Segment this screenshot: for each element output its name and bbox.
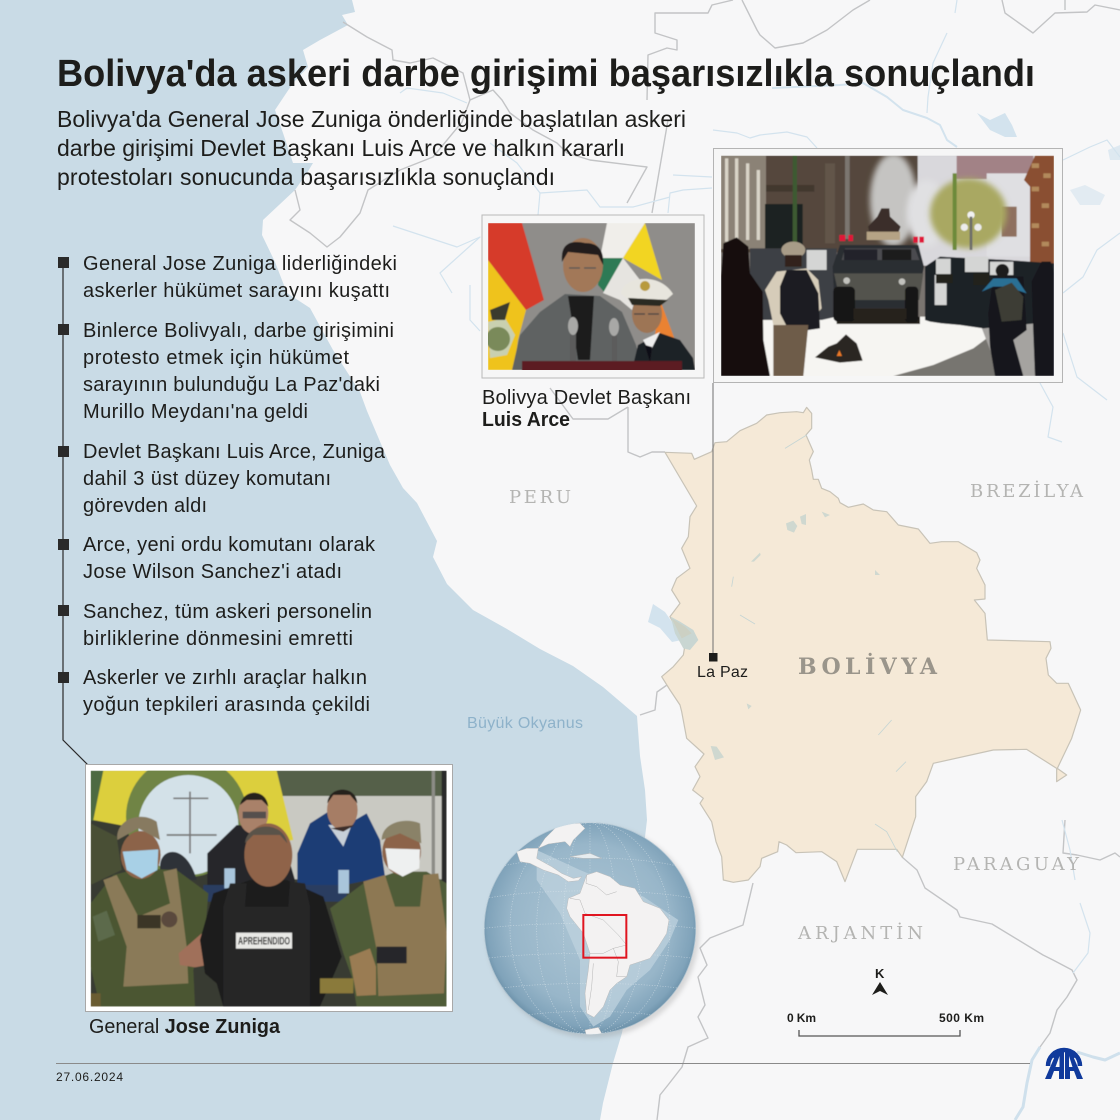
photo: Luis Arce — [482, 215, 704, 378]
photo: armoured vehicle and riot police in Murillo Square — [714, 148, 1062, 382]
Lake Titicaca — [671, 617, 698, 650]
South America — [567, 872, 669, 1017]
podium — [522, 361, 682, 371]
footer rule — [56, 1062, 1030, 1064]
officer — [632, 333, 695, 370]
scale bar: 500 Km — [939, 1011, 984, 1025]
graticule — [484, 822, 696, 1034]
table and bottles — [203, 885, 347, 902]
event 2: protesto etmek için hükümet — [83, 347, 349, 369]
armoured vehicle — [833, 245, 924, 308]
protester in blue — [988, 277, 1027, 376]
left officer hand — [178, 933, 204, 968]
street — [762, 316, 986, 376]
map label: Brezilya: BREZİLYA — [970, 479, 1084, 502]
intro text — [57, 106, 686, 190]
photo: General Jose Zuniga: APREHENDIDO — [238, 935, 290, 947]
national borders in globe — [570, 875, 627, 1010]
Anadolu Agency logo — [1045, 1049, 1083, 1079]
caption: Luis Arce — [482, 387, 691, 431]
event 3 — [58, 441, 386, 517]
event 1 — [58, 253, 397, 302]
continental shelf — [537, 850, 678, 1027]
globe ocean — [484, 822, 696, 1034]
foreground figure left — [721, 237, 770, 376]
figure far right — [1032, 262, 1054, 376]
map label: Peru: PERU — [509, 487, 571, 508]
map label: Arjantin: ARJANTİN — [797, 921, 923, 944]
event 5 — [58, 601, 372, 650]
police line — [750, 248, 837, 320]
timeline connector line — [63, 262, 88, 765]
event 1: askerler hükümet sarayını kuşattı — [83, 280, 390, 302]
caption: Luis Arce: Bolivya Devlet Başkanı — [482, 387, 691, 409]
event 3: görevden aldı — [83, 495, 207, 517]
sea: Büyük Okyanus — [0, 0, 647, 1120]
north arrow — [872, 966, 888, 995]
Arce jacket — [512, 294, 642, 370]
general Zuniga in vest — [200, 880, 342, 1007]
protester with backpack — [765, 268, 822, 325]
rivers and lakes — [393, 0, 1120, 1120]
map label: Bolivya: BOLİVYA — [798, 652, 938, 680]
burning pile — [815, 334, 863, 363]
marker: La Paz — [697, 653, 748, 681]
Bolivia lakes and rivers — [711, 512, 880, 760]
event 4: Jose Wilson Sanchez'i atadı — [83, 561, 342, 583]
leader line: photo to La Paz — [712, 383, 714, 656]
intro text: darbe girişimi Devlet Başkanı Luis Arce ve halkın kararlı — [57, 135, 625, 161]
rim highlight — [484, 823, 696, 1034]
event 2 — [58, 320, 394, 423]
continents — [517, 823, 669, 1037]
event 2: Binlerce Bolivyalı, darbe girişimini — [83, 320, 394, 342]
event 5: birliklerine dönmesini emretti — [83, 628, 353, 650]
photo: General Jose Zuniga — [86, 756, 452, 1012]
left officer — [91, 868, 208, 1007]
seated man in blue — [297, 812, 385, 887]
title: Bolivya'da askeri darbe girişimi başarısızlıkla sonuçlandı — [57, 53, 1035, 95]
event 2: Murillo Meydanı'na geldi — [83, 401, 308, 423]
North and Central America — [517, 848, 582, 882]
map label: Paraguay: PARAGUAY — [953, 854, 1080, 875]
marker: La Paz: La Paz — [697, 664, 748, 681]
event 6: Askerler ve zırhlı araçlar halkın — [83, 667, 367, 689]
event 1: General Jose Zuniga liderliğindeki — [83, 253, 397, 275]
caption: Luis Arce: Luis Arce — [482, 409, 570, 431]
globe shadow — [486, 825, 699, 1038]
sea label: Büyük Okyanus: Büyük Okyanus — [467, 715, 583, 732]
locator globe — [484, 822, 699, 1038]
Bolivia country shape — [662, 407, 1081, 882]
country borders — [290, 0, 1120, 1120]
scale bar: 0 Km — [787, 1011, 816, 1025]
event 4 — [58, 534, 376, 583]
event 4: Arce, yeni ordu komutanı olarak — [83, 534, 376, 556]
seated man in black — [207, 825, 295, 885]
caption: General Jose Zuniga: General Jose Zuniga — [89, 1016, 281, 1038]
intro text: Bolivya'da General Jose Zuniga önderliğinde başlatılan askeri — [57, 106, 686, 132]
north arrow: K — [875, 966, 885, 981]
red locator box — [583, 915, 626, 958]
event 5: Sanchez, tüm askeri personelin — [83, 601, 372, 623]
right officer — [330, 872, 447, 1007]
event 2: sarayının bulunduğu La Paz'daki — [83, 374, 380, 396]
timeline list of events — [58, 253, 397, 765]
event 3: dahil 3 üst düzey komutanı — [83, 468, 331, 490]
microphones — [574, 334, 577, 346]
event 6: yoğun tepkileri arasında çekildi — [83, 694, 370, 716]
event 6 — [58, 667, 370, 716]
intro text: protestoları sonucunda başarısızlıkla sonuçlandı — [57, 164, 555, 190]
scale bar — [787, 1011, 984, 1036]
event 3: Devlet Başkanı Luis Arce, Zuniga — [83, 441, 386, 463]
date: 27.06.2024 — [56, 1070, 123, 1084]
